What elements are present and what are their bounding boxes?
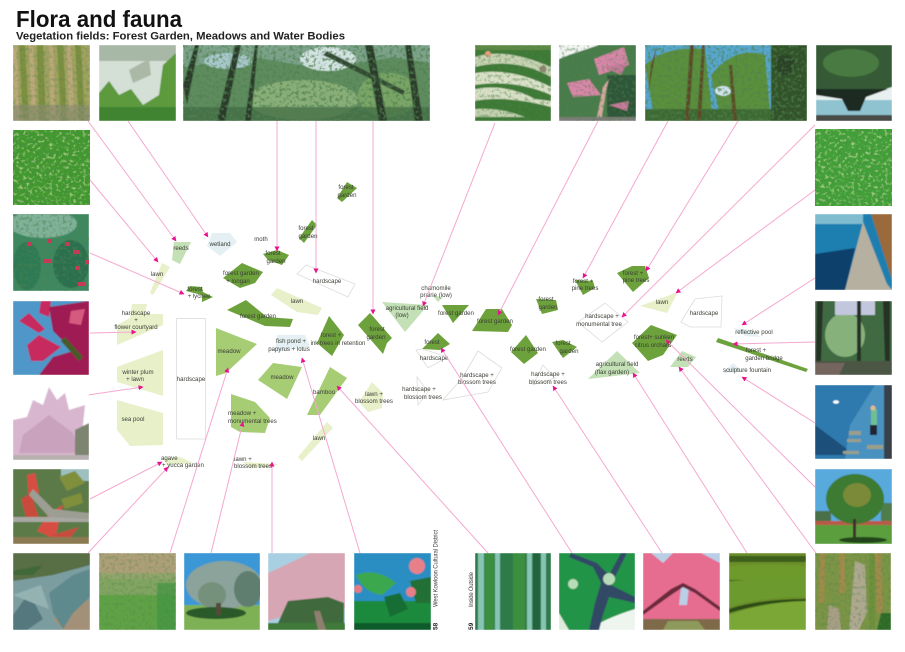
label: moth: moth <box>254 236 268 243</box>
photo: lawn right <box>815 129 892 206</box>
photo: orchid tree flower <box>13 301 89 375</box>
page footer: right folio: Inside Outside <box>469 571 475 607</box>
field: forest and ink trees: forest + <box>321 332 342 339</box>
field: forest and garden bridge <box>716 338 808 372</box>
photo: dry reeds patch <box>815 553 891 630</box>
arrow: banyan to monumental tree <box>622 125 815 317</box>
field: forest small: forest <box>424 339 440 346</box>
field: lawn and blossom trees: blossom trees <box>355 398 393 405</box>
field: forest garden centre: garden <box>367 334 385 341</box>
field: forest garden centre: forest <box>369 326 385 333</box>
field: hardscape and blossom trees 1 <box>443 351 502 400</box>
field: lawn and blossom trees south: lawn + <box>234 456 252 463</box>
field: forest garden long: forest garden <box>240 313 276 320</box>
arrow: lotus photo to fish pond <box>302 358 360 553</box>
photo: tea terraces <box>729 553 806 630</box>
arrow: top-left photo to reeds <box>88 121 176 241</box>
arrow: aloe to agave garden <box>90 462 162 499</box>
field: hardscape diamond <box>416 349 449 368</box>
title: Flora and fauna <box>16 6 183 32</box>
arrow: pines to forest pine 2 <box>646 121 738 271</box>
field: sea pool: sea pool <box>121 416 145 423</box>
field: meadow and monumental trees: monumental trees <box>228 418 277 425</box>
field: agricultural field low: (low) <box>395 312 409 319</box>
field: fish pond: papyrus + lotus <box>268 346 310 353</box>
arrow: panorama to forest garden 3 <box>276 121 278 251</box>
field: hardscape and monumental tree: hardscape + <box>585 313 619 320</box>
page footer: right folio <box>468 571 475 630</box>
photo: orange tree <box>815 469 892 544</box>
photo: lawn <box>13 130 90 205</box>
field: forest and ink trees <box>311 316 365 356</box>
field: meadow 2: meadow <box>270 374 294 381</box>
field: forest small <box>422 333 450 350</box>
field: forest garden 5 <box>472 309 513 332</box>
field: forest garden 3: garden <box>267 258 285 265</box>
field: agave and yucca garden <box>161 455 204 469</box>
page footer: right folio: 59 <box>468 622 475 630</box>
arrow: lychee photo to forest <box>90 253 184 294</box>
field: hardscape and monumental tree: monumental tree <box>576 321 622 328</box>
field: hardscape and monumental tree <box>576 303 628 342</box>
field: forest garden and longan <box>223 263 263 288</box>
field: forest and sunken citrus orchard: citrus orchard <box>635 342 671 349</box>
arrow: water to sculpture fountain <box>742 377 815 423</box>
field: agricultural field flax garden: agricultural field <box>596 361 638 368</box>
photo: reflecting pool deck <box>815 214 892 290</box>
field: fish pond <box>268 335 310 353</box>
field: hardscape and blossom trees 1: hardscape + <box>460 372 494 379</box>
field: forest and pine trees 2: forest + <box>623 270 644 277</box>
field: forest garden 8 <box>552 340 578 358</box>
field: agricultural field flax garden <box>588 351 640 379</box>
field: lawn and blossom trees south: blossom trees <box>234 463 272 470</box>
photo: bamboo <box>475 553 551 630</box>
field: wetland <box>207 233 237 256</box>
field: forest garden 2: garden <box>299 233 317 240</box>
arrow: panorama to hardscape <box>315 121 317 273</box>
field: forest garden 6: forest <box>538 296 554 303</box>
field: hardscape and blossom trees 3: hardscape + <box>531 371 565 378</box>
field: forest garden 8: garden <box>560 348 578 355</box>
field: sculpture fountain <box>723 363 771 374</box>
photo: pink blossom tree on white <box>13 387 89 460</box>
field: agave and yucca garden: agave <box>161 455 178 462</box>
photo: forest canopy panorama <box>183 45 430 121</box>
field: hardscape north: hardscape <box>313 278 342 285</box>
field: lawn and blossom trees: lawn + <box>365 391 383 398</box>
photo: white flowering shrubs <box>475 45 551 121</box>
arrow: panorama to forest garden centre <box>372 121 374 314</box>
field: lawn east: lawn <box>656 299 668 306</box>
field: hardscape and flower courtyard: + <box>134 317 138 324</box>
field: hardscape rectangle <box>176 318 206 439</box>
field: lawn and blossom trees south <box>234 456 278 470</box>
leader arrows <box>88 121 816 553</box>
arrow: plum to winter plum <box>88 387 143 395</box>
arrow: grass photo to lawn <box>90 180 158 262</box>
field: forest and pine trees 2: pine trees <box>623 277 649 284</box>
field: chamomile prairie: prairie (low) <box>420 292 452 299</box>
field: hardscape and blossom trees 2: hardscape + <box>402 386 436 393</box>
field: lawn strip: lawn <box>313 435 325 442</box>
photo: water reeds <box>99 45 176 121</box>
photo: forest path <box>815 301 892 375</box>
photo: lotus <box>354 553 431 630</box>
vegetation field plan <box>114 182 808 470</box>
field: forest garden long <box>227 300 293 327</box>
field: forest and ink trees: ink trees in retention <box>311 340 365 347</box>
arrow: tea field to flax garden <box>633 373 747 553</box>
arrow: reeds photo to reeds east <box>679 367 816 553</box>
photo: pine trees and sky <box>645 45 807 121</box>
field: reeds: reeds <box>173 245 189 252</box>
field: forest and lychee: forest <box>187 286 203 293</box>
field: forest garden 2 <box>298 220 317 243</box>
field: forest garden 4 <box>438 305 474 323</box>
field: agricultural field low <box>382 302 428 332</box>
photo: red aloe <box>13 469 89 544</box>
field: lawn west <box>150 263 170 295</box>
field: forest and pine trees 1: pine trees <box>572 285 598 292</box>
field: forest and pine trees 2 <box>617 266 649 292</box>
field: forest and sunken citrus orchard <box>632 325 677 361</box>
field: hardscape east <box>681 296 722 327</box>
field: meadow 1 <box>216 328 257 376</box>
photo: dry grass reeds <box>13 45 90 121</box>
field: lawn and blossom trees <box>355 382 393 412</box>
field: forest garden 8: forest <box>555 340 571 347</box>
field: forest and lychee: + lychee <box>188 293 211 300</box>
field: forest garden centre <box>358 313 392 354</box>
arrow: pines to forest pine 1 <box>583 121 668 278</box>
photo: water with stepping stones <box>815 385 892 459</box>
photo: meadow grass <box>99 553 176 630</box>
field: hardscape east: hardscape <box>690 310 719 317</box>
field: hardscape diamond: hardscape <box>420 355 449 362</box>
field: forest and lychee <box>186 286 213 302</box>
field: meadow 2 <box>258 363 302 399</box>
field: lawn centre <box>271 288 322 315</box>
field: bamboo: bamboo <box>313 389 336 396</box>
field: forest and pine trees 1 <box>572 278 598 295</box>
arrow: forest path to bridge <box>733 342 815 344</box>
field: hardscape north <box>297 265 355 297</box>
field: forest and garden bridge: garden bridge <box>745 355 783 362</box>
field: reflective pool: reflective pool <box>735 329 773 336</box>
arrow: blossom photo to lawn <box>271 462 273 553</box>
photo: cherry blossom tree <box>268 553 345 630</box>
field: winter plum and lawn: winter plum <box>121 369 154 376</box>
photo: peach blossom avenue <box>643 553 720 630</box>
field: hardscape and blossom trees 3: blossom trees <box>529 379 567 386</box>
field: chamomile prairie: chamomile <box>421 285 451 292</box>
field: forest garden north <box>337 182 357 202</box>
field: hardscape and blossom trees 1: blossom trees <box>458 379 496 386</box>
field: fish pond: fish pond + <box>276 338 306 345</box>
field: bamboo <box>307 367 347 415</box>
field: wetland: wetland <box>208 241 231 248</box>
photo: agave <box>13 553 90 630</box>
field: winter plum and lawn: + lawn <box>126 376 144 383</box>
page footer: left folio <box>432 530 440 630</box>
field: forest garden 5: forest garden <box>477 318 513 325</box>
arrow: flower to courtyard <box>90 332 136 333</box>
arrow: agave photo to garden <box>88 467 168 553</box>
field: meadow 1: meadow <box>217 348 241 355</box>
field: hardscape and flower courtyard: flower courtyard <box>114 324 158 331</box>
photo: tree canopy from below <box>559 553 635 630</box>
field: forest garden 6 <box>536 296 558 314</box>
field: forest and pine trees 1: forest + <box>573 278 594 285</box>
field: sculpture fountain: sculpture fountain <box>723 367 771 374</box>
field: forest garden north: garden <box>338 192 356 199</box>
arrow: grass to lawn east <box>676 190 815 293</box>
field: lawn east <box>640 292 678 313</box>
photo: crape myrtle <box>559 45 636 121</box>
arrow: olive photo to monumental trees <box>211 422 243 553</box>
field: agricultural field flax garden: (flax garden) <box>595 369 629 376</box>
field: hardscape rectangle: hardscape <box>177 376 206 383</box>
photo: red berry shrub <box>13 214 89 291</box>
field: forest garden 3: forest <box>265 250 281 257</box>
field: forest garden and longan: + longan <box>226 278 250 285</box>
field: reeds east: reeds <box>677 356 693 363</box>
photo: banyan by sea <box>816 45 892 121</box>
field: sea pool <box>117 400 163 446</box>
arrow: water photo to wetland <box>128 121 208 237</box>
field: lawn centre: lawn <box>291 298 303 305</box>
arrow: orange tree to citrus orchard <box>666 340 815 487</box>
field: agave and yucca garden: + yucca garden <box>162 462 204 469</box>
field: forest garden 2: forest <box>298 225 314 232</box>
field: forest and garden bridge: forest + <box>746 347 767 354</box>
arrow: tree photo to forest small <box>441 348 572 553</box>
field: hardscape and flower courtyard: hardscape <box>122 310 151 317</box>
field: hardscape and blossom trees 2 <box>402 377 442 405</box>
field: chamomile prairie <box>420 285 452 302</box>
field: reeds <box>172 242 191 264</box>
field: hardscape and blossom trees 3 <box>529 365 567 386</box>
field: forest garden 7 <box>510 335 546 364</box>
field: reeds east <box>670 351 696 367</box>
arrow: peach photo to hardscape <box>553 386 662 553</box>
field: meadow and monumental trees: meadow + <box>228 410 257 417</box>
field: lawn strip <box>298 422 333 461</box>
field: forest garden 6: garden <box>539 304 557 311</box>
field: forest garden 7: forest garden <box>510 346 546 353</box>
field: meadow and monumental trees <box>228 394 277 433</box>
field: winter plum and lawn <box>117 350 163 396</box>
field: forest and sunken citrus orchard: forest+ sunken <box>634 334 674 341</box>
page footer: left folio: 58 <box>432 622 440 630</box>
page footer: left folio: West Kowloon Cultural District <box>434 530 440 607</box>
field: hardscape and blossom trees 2: blossom trees <box>404 394 442 401</box>
field: hardscape and flower courtyard <box>114 304 163 345</box>
subtitle: Vegetation fields: Forest Garden, Meadows and Water Bodies <box>16 30 345 42</box>
arrow: bamboo photo to bamboo field <box>337 386 488 553</box>
arrow: pool to reflective pool <box>742 278 815 325</box>
field: forest garden and longan: forest garden <box>223 270 259 277</box>
field: agricultural field low: agricultural field <box>386 305 428 312</box>
arrow: shrubs to agricultural field <box>423 123 495 306</box>
field: forest garden north: forest <box>338 184 354 191</box>
arrow: meadow photo to meadow <box>170 368 228 553</box>
field: forest garden 3 <box>263 250 289 265</box>
field: lawn west: lawn <box>151 271 163 278</box>
arrow: crape myrtle to forest garden <box>498 121 598 315</box>
field: forest garden 4: forest garden <box>438 310 474 317</box>
photo: olive trees <box>184 553 260 630</box>
